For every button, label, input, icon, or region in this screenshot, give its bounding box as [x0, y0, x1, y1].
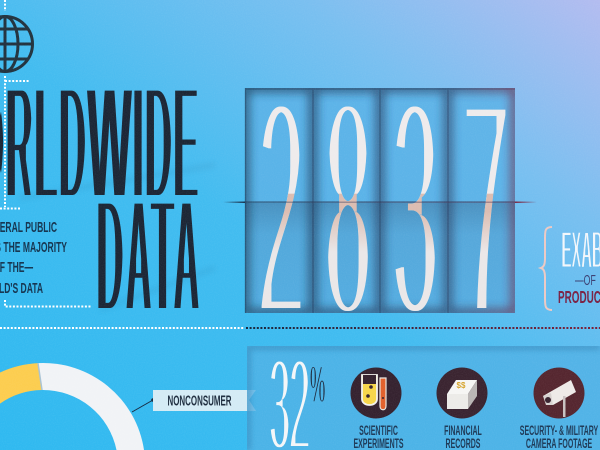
digits: 7: [464, 34, 508, 384]
divider dots: [0, 327, 244, 329]
icon labels: SECURITY- & MILITARY: [520, 424, 599, 439]
ribbon: nonconsumer: NONCONSUMER: [168, 392, 232, 409]
donut chart: [0, 363, 144, 450]
callout: exabytes of production: —OF: [575, 272, 596, 289]
ribbon: nonconsumer: [153, 390, 256, 411]
icon: globe: [0, 16, 32, 72]
brace: [541, 227, 552, 310]
leader line: [132, 398, 155, 412]
icon labels: SCIENTIFIC: [359, 424, 398, 439]
panel: 32 percent: [247, 346, 600, 450]
panel: flip counter 2837: [244, 88, 515, 313]
title: worldwide: [0, 47, 200, 239]
dotted frame around title: [0, 0, 92, 306]
percent sign: %: [310, 356, 325, 414]
title: worldwide: W: [87, 47, 132, 239]
digits: 2: [259, 34, 303, 384]
digits: [259, 34, 508, 384]
decorative streak shadows: [20, 165, 215, 310]
icon: security camera: [534, 368, 584, 418]
digits: 3: [393, 34, 437, 384]
icon: test tubes: [350, 368, 402, 418]
title: data: DATA: [97, 161, 202, 352]
icon: stack of financial records: $$: [457, 381, 466, 390]
title subtext: [0, 219, 67, 297]
icon: stack of financial records: [436, 368, 488, 418]
split line: [223, 202, 537, 203]
icon labels: FINANCIAL: [444, 424, 482, 439]
icon labels: [353, 424, 599, 450]
title: worldwide: IDE: [133, 48, 200, 239]
digits: 8: [326, 34, 370, 384]
callout: exabytes of production: [558, 219, 600, 308]
